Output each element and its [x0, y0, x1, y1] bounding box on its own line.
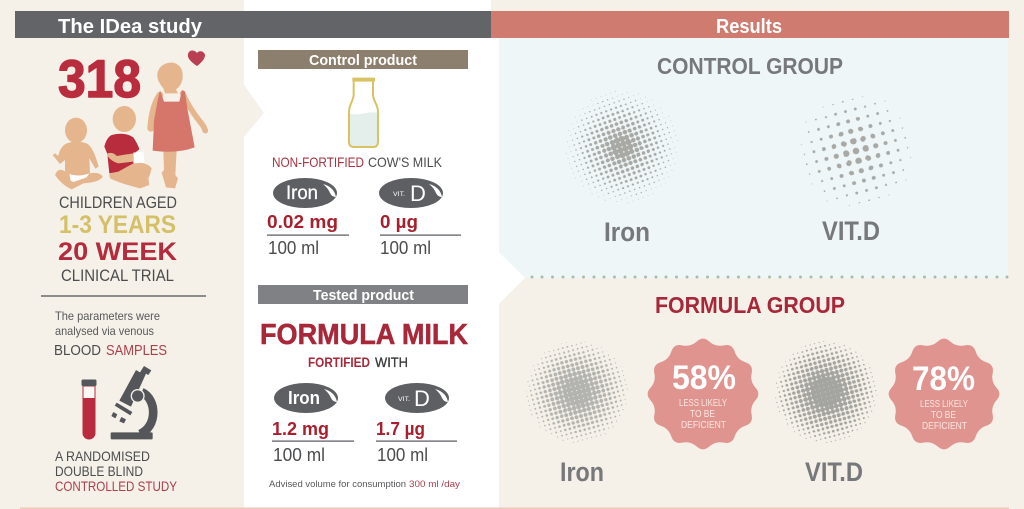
callout: 58% less likely: 58%: [672, 359, 736, 397]
illustration: three children silhouettes: [53, 63, 205, 189]
header: control product: Control product: [309, 52, 417, 69]
chart: control vitamin D halftone: [797, 92, 915, 210]
callout: 58% less likely: LESS LIKELY: [679, 397, 727, 409]
heading: formula milk: FORMULA MILK: [260, 319, 468, 351]
callout: 58% less likely: [648, 339, 758, 449]
value: iron per 100 ml: 100 ml: [273, 445, 325, 465]
icon: milk bottle: [349, 78, 378, 147]
header: results: [491, 11, 1009, 38]
value: vitamin D per 100 ml: [380, 212, 461, 258]
label: vit.D: VIT.D: [805, 457, 863, 487]
text: parameters via venous blood samples: SAMPLES: [106, 342, 167, 359]
text: clinical trial: CLINICAL TRIAL: [61, 266, 174, 285]
text: non-fortified cow's milk: [272, 154, 443, 170]
panel: tested product: [258, 285, 468, 490]
text: fortified with: WITH: [375, 355, 408, 370]
text: parameters via venous blood samples: The parameters were: [55, 309, 160, 323]
callout: 78% less likely: LESS LIKELY: [920, 398, 968, 410]
label: iron: Iron: [560, 457, 604, 487]
callout: 78% less likely: TO BE: [931, 409, 956, 421]
label: iron: Iron: [604, 217, 650, 247]
panel: formula group: [526, 292, 999, 487]
text: randomised double blind controlled study: DOUBLE BLIND: [55, 463, 143, 479]
value: iron per 100 ml: 1.2 mg: [272, 419, 329, 439]
header: tested product: Tested product: [313, 287, 414, 304]
text: non-fortified cow's milk: COW'S MILK: [368, 154, 443, 170]
badge: iron: Iron: [288, 388, 320, 408]
badge: iron: [273, 178, 337, 208]
badge: vitamin D: VIT.: [398, 397, 410, 403]
text: fortified with: FORTIFIED: [308, 355, 370, 370]
text: children aged: CHILDREN AGED: [59, 193, 177, 212]
heading: formula group: FORMULA GROUP: [655, 292, 845, 318]
text: parameters via venous blood samples: [54, 309, 167, 359]
value: vitamin D per 100 ml: 100 ml: [377, 445, 428, 465]
chart: formula vitamin D halftone: [775, 341, 877, 443]
badge: vitamin D: VIT.: [393, 192, 405, 198]
text: randomised double blind controlled study: A RANDOMISED: [55, 448, 150, 464]
text: parameters via venous blood samples: BLOOD: [54, 342, 101, 359]
icon: microscope: [111, 366, 153, 439]
callout: 78% less likely: [889, 339, 999, 449]
icon: blood test tube: [82, 380, 96, 439]
header: control product: [258, 50, 468, 69]
value: iron per 100 ml: 100 ml: [268, 238, 319, 258]
sitting baby in diaper: [53, 118, 103, 189]
badge: vitamin D: D: [414, 386, 430, 411]
panel: study overview: [0, 0, 491, 509]
icon: heart: [188, 50, 205, 66]
text: 20 week: 20 WEEK: [58, 238, 177, 266]
text: non-fortified cow's milk: NON-FORTIFIED: [272, 154, 364, 170]
label: vit.D: VIT.D: [822, 216, 880, 246]
panel: control product: [258, 50, 468, 258]
badge: iron: Iron: [286, 183, 318, 204]
badge: vitamin D: [379, 178, 443, 208]
badge: iron: [274, 383, 338, 413]
sitting baby in red top: [104, 106, 152, 188]
text: parameters via venous blood samples: analysed via venous: [55, 324, 154, 338]
value: iron per 100 ml: [267, 212, 349, 258]
text: advised volume: Advised volume for consumption: [269, 479, 406, 490]
header: tested product: [258, 285, 468, 304]
value: iron per 100 ml: 0.02 mg: [267, 212, 338, 232]
toddler in dress: [151, 63, 205, 188]
badge: vitamin D: [385, 383, 449, 413]
callout: 78% less likely: 78%: [912, 360, 975, 398]
panel: control group: [565, 53, 915, 247]
text: randomised double blind controlled study: [55, 448, 178, 494]
callout: 58% less likely: DEFICIENT: [681, 419, 726, 431]
text: advised volume: 300 ml /day: [409, 479, 460, 490]
value: iron per 100 ml: [272, 419, 354, 465]
value: vitamin D per 100 ml: 100 ml: [380, 238, 431, 258]
panel: results background: [491, 0, 1024, 509]
badge: vitamin D: D: [410, 181, 426, 206]
chart: formula iron halftone: [526, 341, 628, 443]
callout: 58% less likely: TO BE: [690, 408, 715, 420]
chart: control iron halftone: [565, 90, 679, 204]
header: The IDea study: [15, 11, 491, 38]
header: results: Results: [716, 16, 782, 38]
value: vitamin D per 100 ml: 1.7 µg: [376, 419, 425, 439]
number: 318 children: 318: [58, 50, 141, 109]
value: vitamin D per 100 ml: [376, 419, 457, 465]
text: 1-3 years: 1-3 YEARS: [59, 211, 176, 239]
callout: 78% less likely: DEFICIENT: [922, 420, 967, 432]
header: The IDea study: The IDea study: [58, 16, 203, 38]
text: randomised double blind controlled study: CONTROLLED STUDY: [55, 478, 178, 494]
heading: control group: CONTROL GROUP: [657, 53, 843, 79]
value: vitamin D per 100 ml: 0 µg: [380, 212, 418, 232]
